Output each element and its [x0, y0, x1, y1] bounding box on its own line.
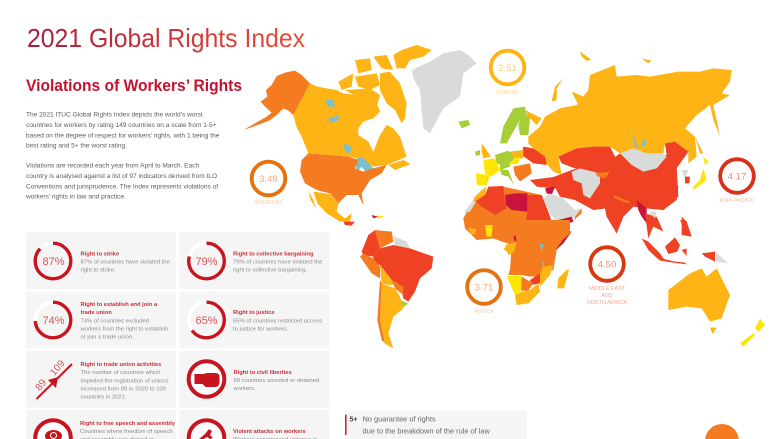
north america	[243, 45, 491, 226]
intro text: workers’ rights in law and practice.	[25, 194, 126, 200]
card: right to establish and join a trade union: or join a trade union.	[80, 334, 134, 340]
intro text: The 2021 ITUC Global Rights Index depicts the world’s worst	[26, 112, 203, 118]
legend: 5+	[350, 416, 357, 424]
score: asia-pacific: ASIA-PACIFIC	[720, 198, 755, 204]
score: middle east and north africa: AND	[601, 293, 613, 299]
orange circle	[705, 424, 739, 439]
score: europe: 2.51	[498, 63, 517, 74]
card: right to free speech and assembly: Countries where freedom of speech	[80, 429, 173, 435]
icon: rising arrow from 89 to 109: 89	[34, 377, 49, 393]
card: right to establish and join a trade union: 74%	[42, 315, 65, 327]
world map	[243, 45, 765, 351]
southern hemisphere	[360, 220, 765, 351]
card: violent attacks on workers: Violent attacks on workers	[233, 429, 306, 435]
eurasia	[500, 52, 732, 238]
card: right to trade union activities: impeded the registration of unions	[80, 378, 169, 384]
card: right to civil liberties: 68 countries arrested or detained	[234, 378, 319, 384]
card: right to establish and join a trade union: 74% of countries excluded	[80, 318, 149, 324]
card: right to civil liberties: workers.	[232, 386, 256, 392]
card: right to strike	[26, 232, 176, 289]
score: africa: 3.71	[475, 282, 493, 294]
score: asia-pacific: 4.17	[728, 172, 746, 182]
card: right to collective bargaining	[180, 232, 330, 289]
card: right to trade union activities: increased from 89 in 2020 to 109	[80, 386, 166, 392]
card: right to trade union activities: countries in 2021.	[80, 394, 127, 400]
score: africa: AFRICA	[474, 309, 494, 315]
score: asia-pacific	[720, 159, 755, 204]
card: right to collective bargaining: 79% of countries have violated the	[233, 260, 322, 266]
score: middle east and north africa: 4.50	[598, 260, 616, 270]
card: right to establish and join a trade union: trade union	[80, 310, 112, 316]
legend: due to the breakdown of the rule of law	[362, 426, 491, 436]
icon: speech prohibited	[35, 420, 71, 439]
title: 2021 Global Rights Index	[27, 23, 305, 53]
card: right to justice: 65% of countries restricted access	[233, 318, 322, 324]
heading: violations of workers' rights: Violations of Workers’ Rights	[26, 76, 242, 95]
card: right to justice	[180, 292, 330, 348]
card: right to free speech and assembly	[26, 410, 176, 439]
score: africa	[467, 270, 501, 315]
score: middle east and north africa: MIDDLE EAST	[589, 286, 626, 292]
score: europe	[491, 51, 524, 96]
intro text: Violations are recorded each year from April to March. Each	[26, 162, 199, 170]
legend: No guarantee of rights	[362, 414, 436, 424]
card: right to collective bargaining: Right to collective bargaining	[233, 252, 314, 258]
card: right to justice: Right to justice	[233, 310, 275, 316]
card: right to establish and join a trade union: Right to establish and join a	[80, 302, 158, 308]
score: americas: AMERICAS	[254, 200, 283, 206]
card: right to collective bargaining: 79%	[195, 256, 218, 268]
card: right to strike: right to strike.	[80, 268, 116, 274]
card: right to collective bargaining: right to collective bargaining.	[233, 268, 307, 274]
intro text: based on the degree of respect for workers’ rights, with 1 being the	[26, 132, 220, 140]
icon: attack	[189, 420, 224, 439]
score: middle east and north africa	[587, 247, 627, 306]
card: right to establish and join a trade union	[26, 292, 176, 348]
card: right to trade union activities: The number of countries which	[80, 370, 160, 376]
legend	[345, 411, 527, 439]
card: right to trade union activities	[26, 351, 176, 408]
card: right to strike: 87%	[42, 256, 65, 268]
card: right to trade union activities: Right to trade union activities	[80, 362, 161, 368]
score: middle east and north africa: NORTH AFRICA	[587, 300, 627, 306]
card: right to strike: 87% of countries have violated the	[80, 260, 170, 266]
intro text: countries for workers by rating 149 countries on a scale from 1-5+	[26, 122, 217, 129]
score: americas	[252, 162, 285, 206]
intro text: country is analysed against a list of 97 indicators derived from ILO	[26, 173, 217, 180]
icon: rising arrow from 89 to 109	[34, 358, 72, 399]
card: right to establish and join a trade union: workers from the right to establish	[80, 326, 168, 332]
icon: rising arrow from 89 to 109: 109	[48, 358, 68, 378]
intro text	[25, 112, 220, 200]
card: right to civil liberties	[180, 351, 330, 408]
intro text: best rating and 5+ the worst rating.	[26, 142, 127, 150]
score: americas: 3.48	[259, 174, 278, 185]
card: right to justice: 65%	[195, 315, 218, 327]
icon: fist	[189, 361, 224, 397]
card: right to strike: Right to strike	[80, 252, 119, 258]
score: europe: EUROPE	[496, 90, 519, 96]
card: violent attacks on workers	[180, 410, 330, 439]
card: right to civil liberties: Right to civil liberties	[234, 370, 292, 376]
card: right to justice: to justice for workers.	[233, 326, 289, 332]
africa and western europe	[463, 151, 572, 270]
intro text: Conventions and jurisprudence. The Index represents violations of	[26, 184, 218, 190]
card: right to free speech and assembly: Right to free speech and assembly	[80, 421, 176, 427]
